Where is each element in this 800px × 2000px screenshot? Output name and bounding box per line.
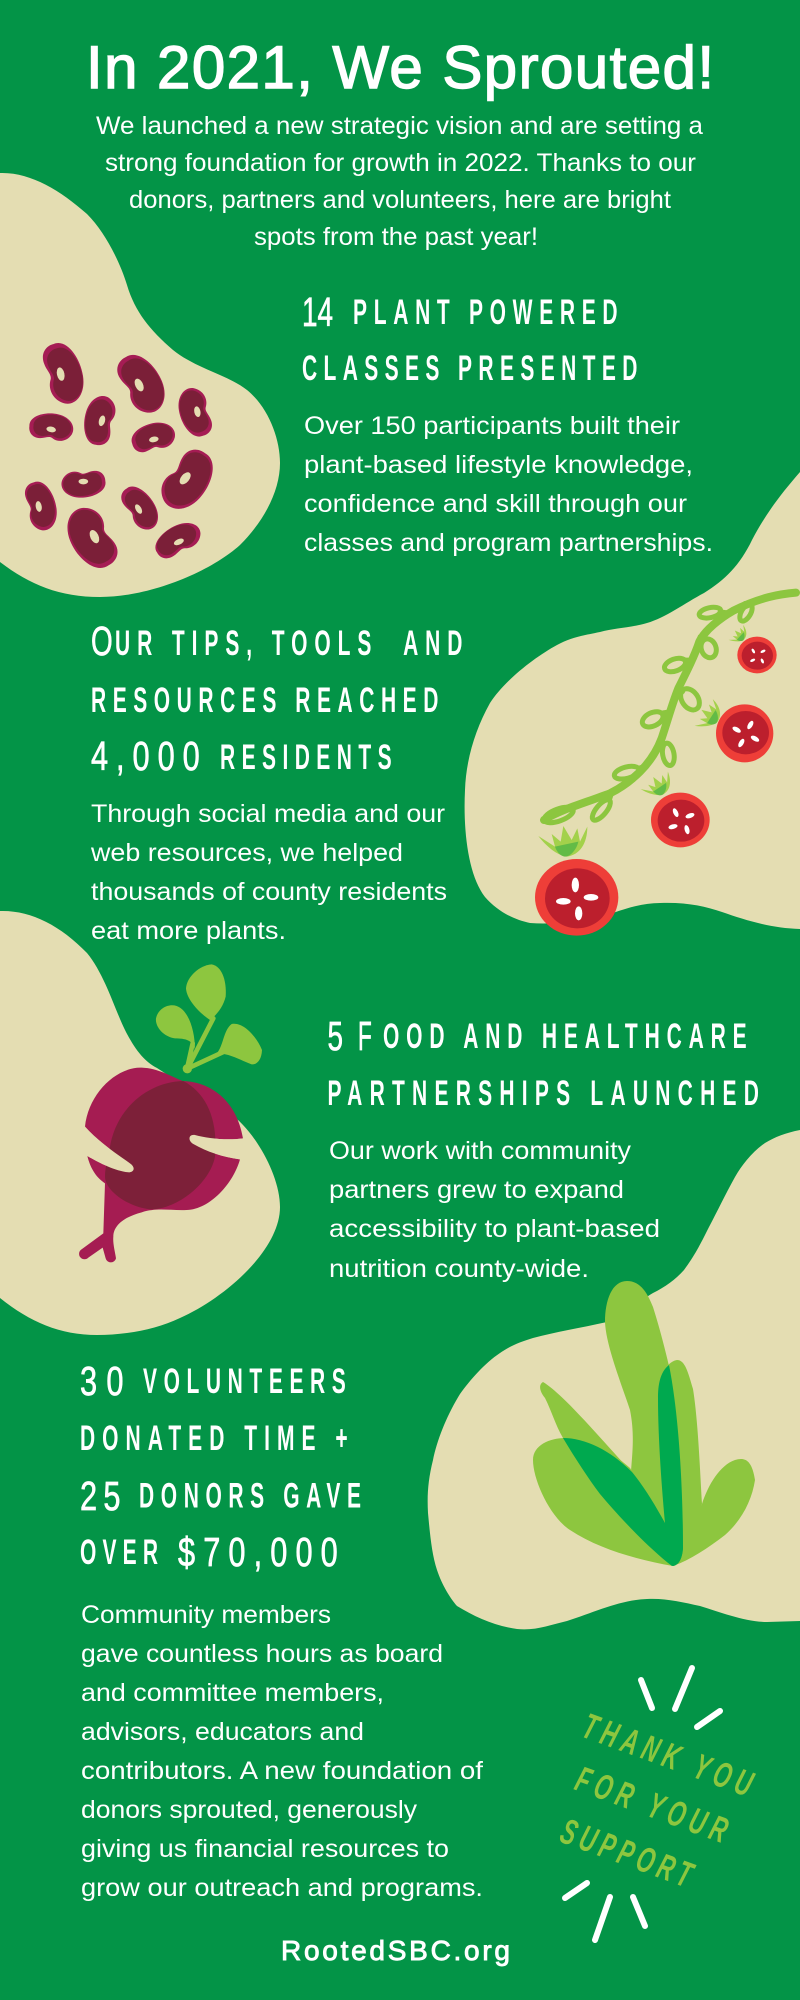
heading: tips, tools and resources: RESIDENTS [220,739,392,777]
heading: volunteers and donors: $70,000 [178,1529,338,1575]
sparkle strokes [565,1668,720,1940]
callout: thank you: FOR YOUR [570,1760,733,1851]
heading: tips, tools and resources: 4,000 [91,733,200,779]
blob: beans background [0,173,280,597]
text: volunteers body: Community members [81,1601,331,1629]
intro text [96,112,703,251]
text: partnerships body: Our work with community [329,1137,632,1165]
intro text: spots from the past year! [254,223,538,251]
text: volunteers body: giving us financial resources to [81,1835,449,1863]
heading: food and healthcare partnerships: F [358,1014,372,1060]
text: partnerships body: accessibility to plant-based [329,1215,660,1243]
callout: thank you: SUPPORT [555,1812,699,1896]
heading: volunteers and donors: 25 [80,1473,120,1519]
heading: food and healthcare partnerships: 5 [328,1014,343,1059]
heading: volunteers and donors: DONATED TIME + [80,1420,348,1458]
text: tips body: Through social media and our [91,800,445,828]
callout: thank you [555,1668,759,1940]
beet right slit [189,1135,243,1159]
beet leaves [156,964,262,1073]
icon: kidney beans [23,339,224,576]
calyx: large [538,826,587,857]
blob: leaves background [428,1130,800,1629]
text: volunteers body: gave countless hours as board [81,1640,443,1668]
text: volunteers body [81,1601,483,1902]
heading: tips, tools and resources: O [91,619,113,664]
text: classes body: classes and program partnerships. [304,529,713,557]
intro text: donors, partners and volunteers, here are bright [129,186,671,214]
heading: food and healthcare partnerships [328,1014,759,1113]
text: volunteers body: and committee members, [81,1679,384,1707]
text: classes body: confidence and skill through our [304,490,687,518]
calyx: medium lower [638,771,675,802]
heading: food and healthcare partnerships: PARTNERSHIPS LAUNCHED [328,1075,759,1113]
intro text: We launched a new strategic vision and are setting a [96,112,703,140]
blob: tomato background [465,472,800,929]
text: classes body: Over 150 participants built their [304,412,680,440]
text: partnerships body: partners grew to expand [329,1176,624,1204]
heading: volunteers and donors: VOLUNTEERS [143,1363,346,1401]
icon: beet [79,964,262,1262]
heading: food and healthcare partnerships: OOD AND HEALTHCARE [383,1018,747,1056]
beet dark overlap [105,1081,216,1209]
text: partnerships body [329,1137,660,1283]
heading: plant powered classes: PLANT POWERED [353,294,618,332]
title: In 2021, We Sprouted! [86,34,714,101]
heading: tips, tools and resources: RESOURCES REACHED [91,682,438,720]
heading: volunteers and donors [80,1358,361,1575]
text: tips body: web resources, we helped [90,839,403,867]
text: classes body [304,412,713,557]
callout: thank you: THANK YOU [577,1707,759,1805]
icon: green leaves [533,1281,755,1566]
beet left slit [85,1127,134,1172]
heading: plant powered classes: 14 [302,290,333,335]
heading: volunteers and donors: 30 [80,1358,124,1404]
text: tips body [90,800,447,945]
text: tips body: eat more plants. [91,917,286,945]
tomato: lower middle [651,793,710,847]
text: tips body: thousands of county residents [91,878,447,906]
text: volunteers body: grow our outreach and programs. [81,1874,483,1902]
text: partnerships body: nutrition county-wide. [329,1255,589,1283]
tomato: large [535,859,618,936]
tomato: upper middle [716,704,773,762]
calyx: small [726,625,750,647]
heading: tips, tools and resources: UR TIPS, TOOLS AND [115,625,462,663]
text: classes body: plant-based lifestyle knowledge, [304,451,693,479]
text: volunteers body: contributors. A new foundation of [81,1757,483,1785]
heading: plant powered classes: CLASSES PRESENTED [302,350,637,388]
heading: volunteers and donors: OVER [80,1534,158,1572]
heading: tips, tools and resources [91,619,462,779]
icon: tomato vine [535,593,796,936]
heading: volunteers and donors: DONORS GAVE [139,1477,361,1516]
text: volunteers body: advisors, educators and [81,1718,364,1746]
heading: plant powered classes [302,290,637,388]
footer: website: RootedSBC.org [281,1935,510,1966]
blob: beet background [0,911,280,1335]
tomato: small [737,637,777,673]
beet root [79,1068,243,1262]
intro text: strong foundation for growth in 2022. Thanks to our [105,149,696,177]
text: volunteers body: donors sprouted, generously [81,1796,418,1824]
calyx: medium upper [690,699,727,735]
